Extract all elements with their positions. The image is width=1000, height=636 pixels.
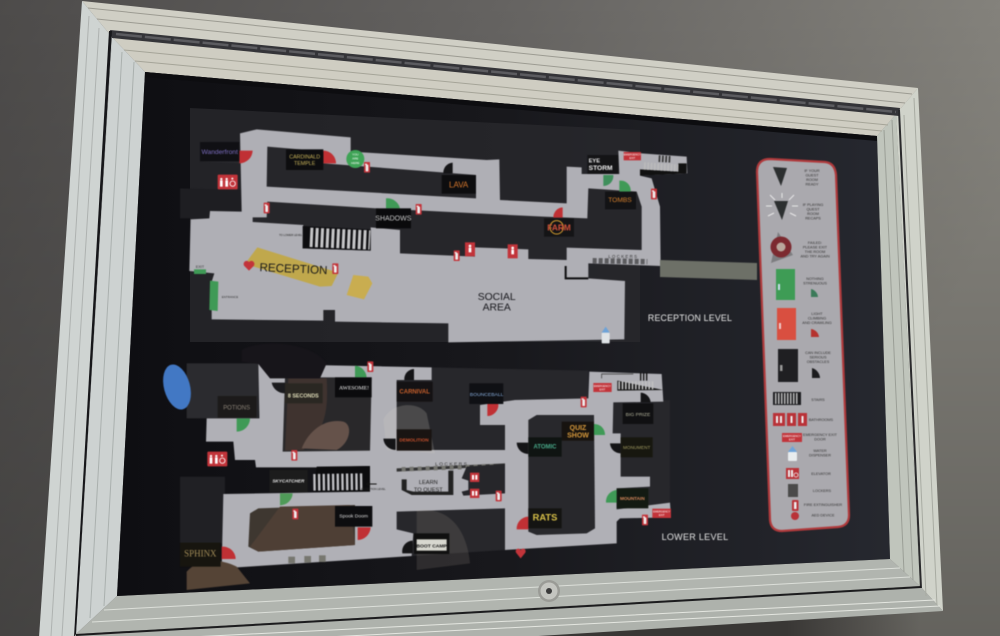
lockers [593, 254, 647, 262]
logo: orange room [605, 192, 636, 209]
corridor floor plan [206, 364, 671, 568]
legend: green door [776, 269, 827, 300]
emergency exits [593, 383, 671, 518]
dark room backdrop [180, 142, 242, 218]
logo: right middle room: MONUMENT [623, 445, 651, 450]
legend: aed [791, 512, 835, 520]
panel: legend [757, 159, 849, 531]
reception desk [245, 247, 338, 287]
legend: room occupied: RECAPS [805, 216, 821, 220]
logo: dim room: POTIONS [223, 405, 250, 411]
logo: orange room: TOMBS [608, 197, 632, 204]
logo: farm [544, 218, 574, 237]
legend: fire extinguisher [792, 500, 842, 511]
lower corridor room [248, 505, 355, 552]
legend: emergency exit: EMERGENCY [783, 434, 801, 438]
you are here marker: ARE [352, 157, 358, 161]
aed heart [244, 261, 254, 271]
logo: eye of the storm: STORM [589, 165, 613, 172]
legend: failed: FAILED: [808, 241, 822, 245]
lower level label: LOWER LEVEL [662, 532, 728, 542]
legend: black door: CAN INCLUDE [805, 351, 831, 355]
frame lock [538, 580, 560, 602]
wall notch [566, 266, 588, 278]
room with reflected face [283, 377, 372, 452]
legend: black door: SERIOUS [809, 356, 827, 360]
logo: boot camp: BOOT CAMP [416, 543, 448, 549]
lockers [397, 461, 505, 472]
light reflection streak [660, 260, 757, 280]
upper right stairs [640, 159, 687, 176]
legend: stairs [773, 392, 825, 405]
note to lower stairs [361, 482, 386, 491]
entrance [209, 281, 238, 311]
reception level label: RECEPTION LEVEL [648, 313, 732, 323]
legend: black door [778, 349, 831, 382]
learn to quest room [402, 471, 453, 495]
legend: room ready: IF YOUR [804, 169, 820, 173]
emergency exits: EMERGENCY [594, 384, 611, 388]
emergency exit: EMERGENCY [624, 153, 641, 157]
logo: spook doom [335, 506, 372, 527]
logo: eye of the storm [587, 155, 618, 174]
lockers: LOCKERS [608, 254, 638, 259]
legend: elevator: ELEVATOR [811, 472, 831, 476]
logo: purple room: Wanderfront [201, 149, 238, 156]
legend: elevator [786, 468, 831, 479]
legend: room ready [773, 167, 820, 186]
learn to quest room: TO QUEST [414, 487, 443, 493]
logo: 8 seconds: 8 SECONDS [288, 393, 319, 399]
logo: orange room [397, 429, 432, 451]
legend: bathrooms: BATHROOMS [809, 418, 834, 422]
blue reflection blob [158, 361, 196, 413]
you are here marker [346, 150, 364, 168]
logo: purple room [200, 142, 239, 161]
logo: farm: FARM [547, 222, 571, 232]
restroom signs [465, 242, 518, 258]
legend: room occupied: ROOM [807, 212, 819, 216]
room logos [200, 142, 636, 237]
legend: water dispenser: DISPENSER [809, 454, 831, 458]
logo: eye of the storm: EYE [589, 159, 600, 165]
logo: quiz show [562, 422, 594, 441]
logo: orange room: DEMOLITION [399, 438, 429, 443]
logo: lava [442, 175, 476, 194]
legend: water dispenser [788, 446, 831, 461]
logo: awesome: AWESOME! [339, 385, 369, 391]
legend: failed: AND TRY AGAIN [800, 254, 830, 258]
small lockers row [288, 555, 326, 563]
stairs [313, 466, 370, 492]
legend: failed: THE ROOM [805, 250, 825, 254]
logo: cardinal temple [286, 149, 323, 170]
logo: right upper room: BIG PRIZE [626, 412, 651, 418]
legend: red door: AND CRAWLING [802, 321, 832, 325]
legend: red door: LIGHT [811, 312, 823, 316]
map: lower level [180, 344, 671, 590]
logo: carnival: CARNIVAL [399, 389, 430, 395]
entrance: ENTRANCE [222, 295, 238, 299]
logo: grey room: SHADOWS [375, 216, 412, 223]
legend: failed [770, 232, 830, 263]
legend: room ready: GUEST [805, 174, 819, 178]
central rooms [253, 188, 642, 260]
emergency exit: EXIT [629, 156, 636, 160]
right stairs [602, 374, 663, 391]
exit marker [194, 265, 206, 274]
note to lower stairs: RECEPTION LEVEL [361, 487, 386, 491]
water dispenser [602, 327, 610, 343]
legend: black door: OBSTACLES [807, 360, 830, 364]
corridor floor plan [189, 129, 687, 342]
legend: room occupied: QUEST [806, 208, 820, 212]
upper corridor rooms [267, 147, 476, 198]
logo: cardinal temple: TEMPLE [294, 161, 316, 167]
door wedges [222, 366, 651, 559]
emergency exits: EMERGENCY [653, 510, 670, 514]
logo: skycatcher: SKYCATCHER [272, 479, 305, 484]
logo: rats [528, 508, 562, 528]
learn to quest room: LEARN [419, 480, 438, 486]
emergency exit [624, 152, 641, 160]
logo: right upper room [623, 403, 653, 424]
social area label: SOCIAL [478, 292, 516, 303]
legend: green door: STRENUOUS [803, 282, 827, 286]
logo: quiz show: QUIZ [570, 425, 587, 432]
legend: room ready: READY [805, 182, 819, 186]
legend: room occupied [766, 193, 823, 220]
room logos [180, 377, 653, 567]
dim reflection panels [180, 363, 670, 556]
note to lower level: TO LOWER LEVEL [279, 233, 303, 237]
legend: stairs: STAIRS [811, 398, 825, 402]
aed marker [516, 549, 526, 558]
logo: awesome [335, 377, 372, 397]
you are here marker: YOU [352, 152, 359, 156]
legend: emergency exit: EMERGENCY EXIT [803, 433, 838, 437]
logo: rats: RATS [533, 513, 557, 523]
logo: lava: LAVA [449, 180, 469, 189]
logo: bounceball [469, 383, 504, 404]
restroom cluster [462, 464, 505, 496]
legend: aed: AED DEVICE [812, 514, 835, 518]
central quest room [528, 415, 595, 535]
legend: failed: PLEASE EXIT [803, 246, 828, 250]
legend: lockers: LOCKERS [813, 489, 832, 493]
reception desk: RECEPTION [259, 261, 328, 277]
restroom signs [470, 473, 479, 498]
exit marker: EXIT [196, 265, 205, 269]
logo: sphinx [180, 543, 221, 567]
logo: green and red room [617, 488, 648, 508]
legend: bathrooms [773, 413, 834, 426]
legend: red door [777, 308, 832, 340]
logo: skycatcher [269, 470, 308, 492]
logo: carnival [397, 382, 433, 402]
logo: boot camp [414, 533, 449, 554]
logo: right middle room [621, 437, 653, 457]
legend: lockers [788, 484, 832, 497]
social area label: AREA [483, 303, 511, 314]
emergency exits: EXIT [659, 513, 665, 517]
logo: sphinx: SPHINX [184, 549, 217, 559]
logo: quiz show: SHOW [567, 432, 589, 439]
legend: green door: NOTHING [806, 277, 824, 281]
legend: red door: CLIMBING [808, 316, 826, 320]
map: reception level [180, 129, 687, 343]
lockers: LOCKERS [435, 461, 468, 467]
legend: fire extinguisher: FIRE EXTINGUISHER [804, 503, 842, 507]
yellow kiosk [347, 275, 372, 299]
you are here marker: HERE [351, 161, 359, 165]
fire extinguisher icons [291, 361, 648, 525]
glass panel [117, 72, 890, 596]
legend: room occupied: IF PLAYING [803, 203, 823, 207]
logo: spook doom: Spook Doom [339, 513, 368, 519]
logo: cardinal temple: CARDINALD [289, 155, 320, 161]
emergency exits: EXIT [599, 387, 606, 391]
reflection of person [187, 344, 470, 590]
logo: green room: ATOMIC [533, 445, 557, 451]
elevator icon [218, 175, 238, 189]
elevator icon [207, 452, 227, 466]
logo: bounceball: BOUNCEBALL [470, 392, 504, 398]
logo: green and red room: MOUNTAIN [620, 496, 645, 501]
fire extinguisher icons [264, 162, 657, 274]
logo: grey room [375, 208, 412, 228]
legend: room ready: ROOM [806, 178, 818, 182]
stairs [303, 226, 371, 251]
legend: emergency exit: DOOR [814, 438, 826, 442]
legend: emergency exit: EXIT [789, 438, 795, 442]
logo: green room [528, 437, 562, 457]
door wedges [239, 151, 631, 218]
logo: 8 seconds [285, 383, 323, 403]
legend: emergency exit [782, 433, 838, 442]
logo: dim room [218, 396, 257, 418]
legend: water dispenser: WATER [813, 449, 827, 453]
